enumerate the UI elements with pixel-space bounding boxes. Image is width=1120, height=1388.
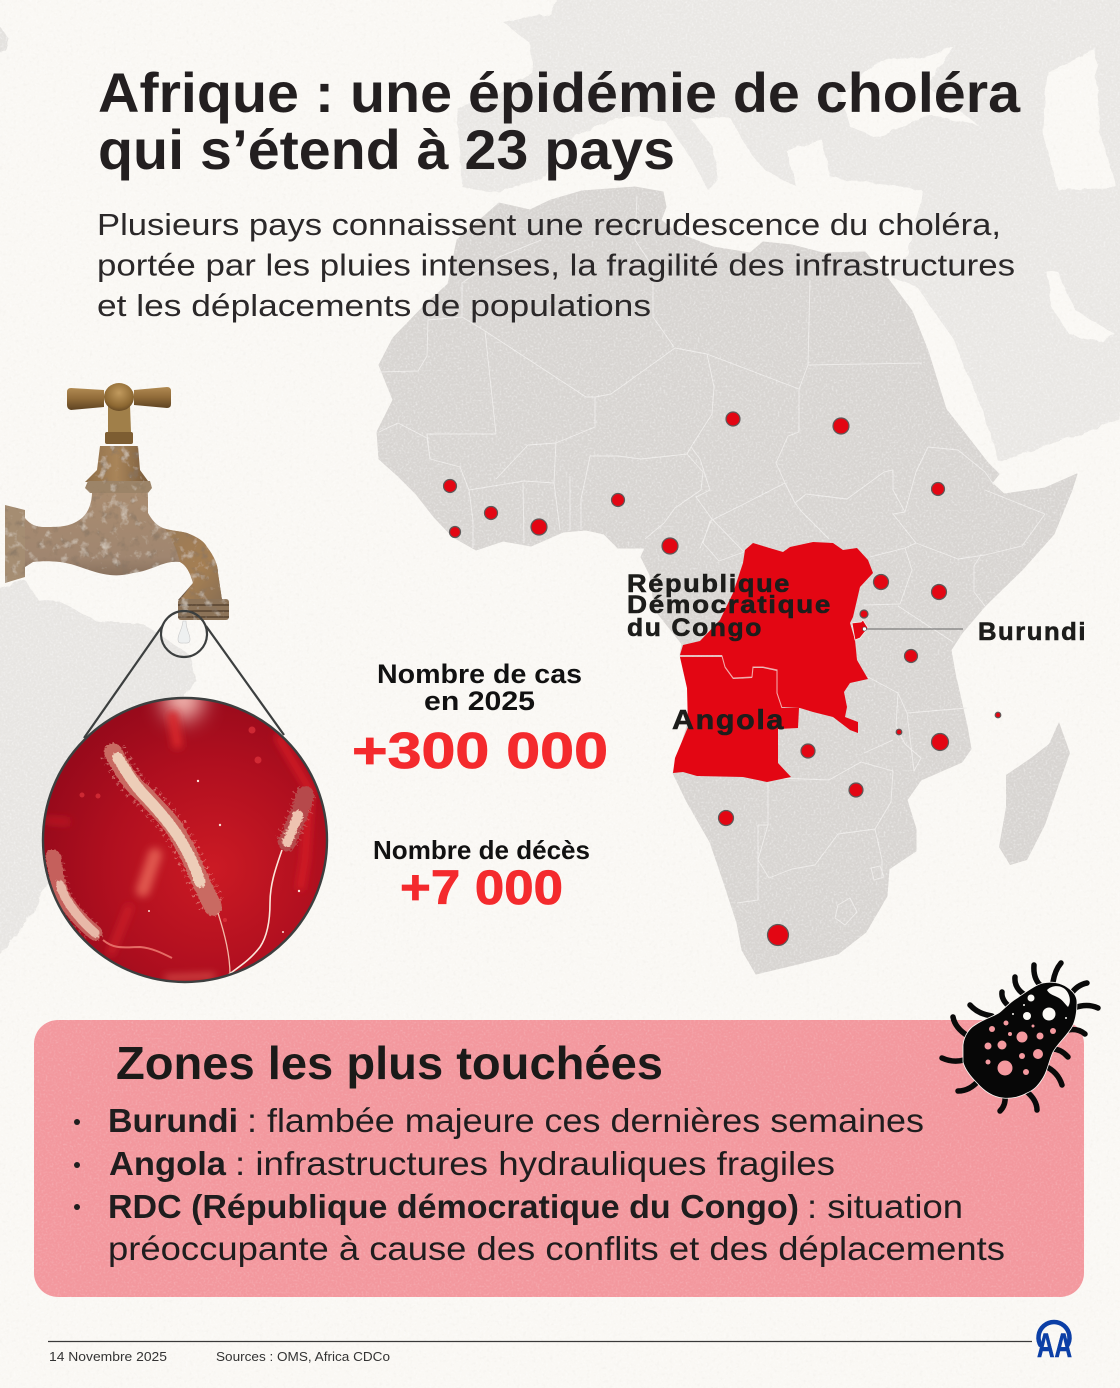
background land: Europe and Asia [457, 0, 1120, 462]
subtitle: portée par les pluies intenses, la fragilité des infrastructures [97, 248, 1015, 282]
pink spots [984, 1020, 1056, 1076]
background land: South America [0, 580, 195, 968]
bacterium: right [228, 795, 305, 975]
subtitle: Plusieurs pays connaissent une recrudescence du choléra, [97, 207, 1001, 242]
faucet body [25, 492, 222, 600]
highlighted country: Democratic Republic of the Congo [680, 542, 873, 733]
body [963, 982, 1077, 1098]
bullet list: most affected zones: Burundi [108, 1102, 238, 1139]
sea: Black Sea [840, 48, 978, 138]
background glow [163, 680, 203, 720]
sea: Persian Gulf [1048, 272, 1116, 342]
statistic: number of cases: en 2025 [424, 686, 535, 716]
white spots [1012, 986, 1070, 1020]
magnifier lens on drop [84, 611, 284, 738]
statistic: number of cases: +300 000 [352, 722, 608, 779]
footer date: 14 Novembre 2025 [49, 1350, 167, 1364]
statistic: number of deaths: Nombre de décès [373, 835, 590, 865]
collar [105, 432, 133, 444]
bullet list: most affected zones [74, 1102, 1005, 1267]
handle: right wing [134, 387, 171, 408]
title: Afrique : une épidémie de choléra [98, 61, 1021, 124]
statistic: number of cases [352, 659, 608, 779]
title [98, 61, 1021, 181]
logo: Anadolu Agency: AA [1037, 1327, 1072, 1365]
subtitle [97, 207, 1015, 323]
handle: left wing [67, 388, 104, 410]
wall flange [5, 505, 25, 583]
logo: Anadolu Agency [1037, 1322, 1072, 1365]
sea: Caspian [1043, 50, 1116, 190]
map labels: Burundi [978, 618, 1087, 646]
bullet list: most affected zones: Angola [109, 1145, 227, 1182]
map labels: République [627, 570, 791, 598]
case markers [444, 412, 1001, 946]
bullet list: most affected zones: : infrastructures hydrauliques fragiles [235, 1145, 835, 1182]
zones heading: Zones les plus touchées [116, 1037, 663, 1089]
map of Africa: highlighted countries and markers [444, 412, 1001, 946]
spout [165, 529, 222, 600]
bullet list: most affected zones: RDC (République démocratique du Congo) [108, 1188, 799, 1225]
footer sources: Sources : OMS, Africa CDCo [216, 1350, 390, 1364]
particles [148, 780, 300, 933]
map labels [627, 570, 1087, 735]
bullet list: most affected zones: préoccupante à cause des conflits et des déplacements [108, 1230, 1005, 1267]
map labels: du Congo [627, 614, 763, 642]
statistic: number of cases: Nombre de cas [377, 659, 582, 689]
icon: dripping faucet [5, 383, 229, 643]
callout line: Burundi [862, 627, 963, 631]
nut [85, 481, 152, 493]
footer rule [48, 1340, 1032, 1342]
legs [942, 963, 1098, 1111]
highlighted country: Angola [673, 657, 799, 782]
handle knob [104, 383, 134, 411]
highlighted country: Burundi [852, 620, 868, 640]
bullet list: most affected zones: : flambée majeure ces dernières semaines [247, 1102, 924, 1139]
title: qui s’étend à 23 pays [98, 118, 675, 181]
continent [377, 187, 1077, 974]
water drop [178, 621, 190, 643]
map labels: Angola [672, 704, 785, 735]
stem [108, 405, 131, 432]
icon: bacterium [942, 963, 1098, 1111]
country borders [379, 197, 1045, 925]
background land: top-left fragment [0, 20, 10, 55]
nozzle thread [178, 599, 229, 620]
DRC and Angola border [680, 656, 782, 708]
map of Africa: land [377, 187, 1077, 974]
bacterium: centre [113, 752, 230, 975]
panel: microscope view of cholera bacteria [43, 680, 327, 982]
bacterium: left [53, 857, 172, 958]
subtitle: et les déplacements de populations [97, 288, 651, 323]
bottom glow [165, 976, 215, 978]
statistic: number of deaths: +7 000 [400, 862, 563, 915]
bullet list: most affected zones: : situation [807, 1188, 963, 1225]
panel: most affected zones background [34, 1020, 1084, 1297]
map labels: Démocratique [627, 591, 832, 619]
Madagascar [999, 722, 1070, 865]
bonnet [85, 446, 148, 482]
statistic: number of deaths [373, 835, 590, 915]
